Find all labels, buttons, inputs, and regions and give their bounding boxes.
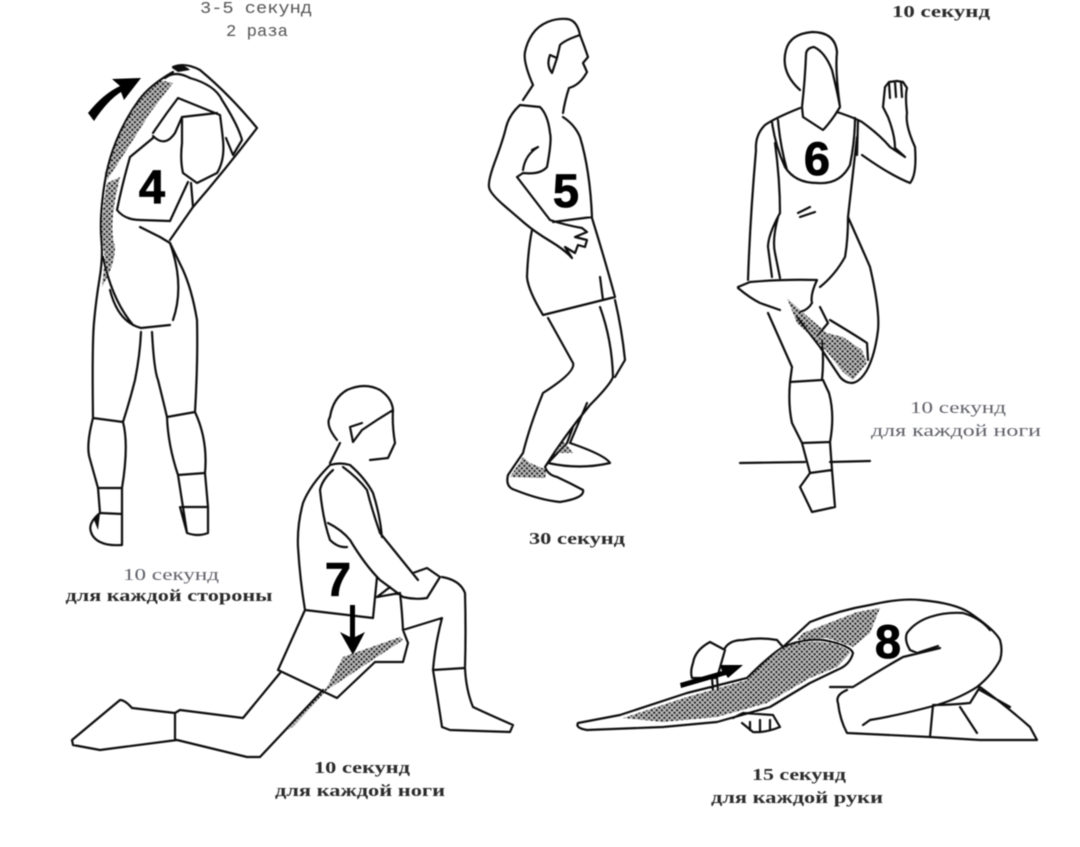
number 8: 8: [875, 615, 901, 668]
caption: figure 7: для каждой ноги: [275, 781, 445, 800]
caption: figure 4: 10 секунд: [123, 565, 219, 584]
icon: hand dark tip: [94, 65, 190, 530]
number 7: 7: [325, 553, 351, 606]
figure 7: kneeling hip flexor stretch: [72, 386, 513, 757]
arm and head outline: [103, 65, 257, 328]
shaded thigh: [787, 298, 867, 380]
shaded feet: [510, 440, 573, 478]
arrow: downward: [340, 605, 365, 655]
figure 4: standing side bend: [88, 65, 257, 545]
number 5: 5: [553, 164, 579, 217]
ground line: [740, 461, 870, 463]
shaded shoulder and arm: [623, 608, 880, 722]
caption: figure 6: для каждой ноги: [871, 421, 1041, 440]
caption: figure 5: 30 секунд: [529, 529, 626, 548]
body outline: [72, 386, 513, 757]
body outline: [738, 32, 915, 512]
caption: figure 7: 10 секунд: [314, 758, 411, 777]
arrow: stretch direction: [680, 665, 743, 688]
shaded stretched muscles: [102, 80, 173, 287]
figure 5: standing squat: [489, 19, 625, 502]
caption: figure 4 top: 3-5 секунд: [200, 0, 312, 19]
caption: figure 4 top: 2 раза: [226, 23, 288, 42]
caption: figure 6: 10 секунд: [910, 398, 1006, 417]
caption: figure 7: [275, 758, 445, 800]
figure 6: standing quad stretch: [738, 32, 915, 512]
body outline: [577, 600, 1037, 740]
body outline: [88, 72, 208, 545]
number 6: 6: [804, 132, 830, 185]
caption: figure 4: для каждой стороны: [66, 586, 272, 605]
caption: figure 4: [66, 565, 272, 605]
caption: figure 8: 15 секунд: [752, 765, 847, 784]
caption: figure 6: [871, 398, 1041, 440]
arrow: upward bend direction: [88, 78, 141, 121]
caption: figure 4 top: [200, 0, 312, 42]
figure 8: child pose stretch: [577, 600, 1037, 740]
number 4: 4: [139, 160, 165, 213]
caption: figure 8: [711, 765, 883, 807]
shaded thigh: [287, 637, 403, 730]
body outline: [489, 19, 625, 502]
caption: figure 6 top: 10 секунд: [892, 2, 991, 21]
caption: figure 8: для каждой руки: [711, 788, 883, 807]
